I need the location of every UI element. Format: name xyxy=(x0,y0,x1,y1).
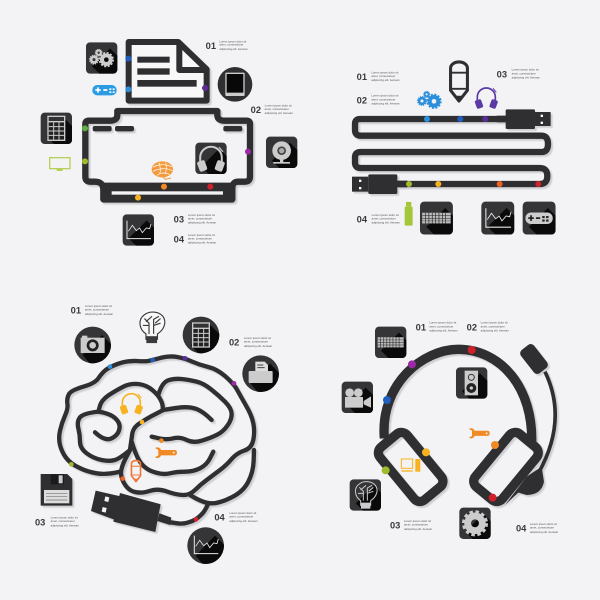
icon: blue gears xyxy=(418,91,441,108)
text: 02 xyxy=(467,321,509,332)
icon: green usb stick xyxy=(405,202,413,226)
text: 01: 01 xyxy=(416,322,426,332)
text: 03: 03 xyxy=(497,70,507,80)
text: 02: amet, consectetuer xyxy=(265,107,289,111)
text: 02: 02 xyxy=(229,338,239,348)
text: 02: adipiscing elit. Aenean xyxy=(371,101,400,105)
panel: USB cable infographic xyxy=(352,62,556,235)
icon: orange wrench xyxy=(469,428,490,438)
color dots xyxy=(82,56,251,201)
text: 02: adipiscing elit. Aenean xyxy=(481,328,509,332)
icon: printer xyxy=(242,355,281,394)
text: 04: adipiscing elit. Aenean xyxy=(188,241,217,245)
text: 03: 03 xyxy=(35,517,45,527)
icon: keyboard xyxy=(375,327,406,358)
color dots xyxy=(406,116,541,187)
text: 01: amet, consectetuer xyxy=(371,74,395,78)
text: 02: Lorem ipsum dolor sit xyxy=(265,103,292,107)
text: 02: amet, consectetuer xyxy=(371,97,395,101)
text: 04: Lorem ipsum dolor sit xyxy=(229,511,257,515)
text: 03: adipiscing elit. Aenean xyxy=(51,523,79,527)
icon: yellow computer xyxy=(401,459,420,472)
text: 01: adipiscing elit. Aenean xyxy=(85,312,114,316)
text: 02: 02 xyxy=(357,95,367,105)
text: 03: Lorem ipsum dolor sit xyxy=(51,515,78,519)
text: 04: amet, consectetuer xyxy=(188,237,212,241)
text: 04: adipiscing elit. Aenean xyxy=(229,519,258,523)
text: 04: 04 xyxy=(214,513,226,523)
text: 02: Lorem ipsum dolor sit xyxy=(371,94,399,98)
icon: brain bulb xyxy=(139,309,165,343)
text: 01: amet, consectetuer xyxy=(429,324,453,328)
text: 03: Lorem ipsum dolor sit xyxy=(404,519,431,523)
text: 02 xyxy=(229,336,273,348)
text: 01: 01 xyxy=(206,41,216,51)
text: 03 xyxy=(35,515,79,527)
icon: orange wrench xyxy=(155,447,177,458)
icon: gamepad xyxy=(523,202,556,235)
text: 03 xyxy=(174,213,217,225)
text: 02: 02 xyxy=(251,105,261,115)
icon: purple headphones xyxy=(474,88,498,109)
icon: gear xyxy=(459,508,491,539)
text: 01: Lorem ipsum dolor sit xyxy=(429,321,457,325)
icon: orange brain xyxy=(152,161,173,179)
text: 01: adipiscing elit. Aenean xyxy=(371,78,400,82)
text: 03: adipiscing elit. Aenean xyxy=(404,527,433,531)
text: 03 xyxy=(497,68,540,80)
icon: pencil xyxy=(451,62,467,101)
printer cable xyxy=(85,111,250,203)
text: 04: adipiscing elit. Aenean xyxy=(372,221,400,225)
text: 04: amet, consectetuer xyxy=(530,526,554,530)
text: 04 xyxy=(516,522,559,534)
text: 02 xyxy=(251,103,293,115)
text: 01: amet, consectetuer xyxy=(219,43,243,47)
icon: keyboard xyxy=(420,202,453,235)
icon: calculator xyxy=(41,113,72,144)
text: 01: 01 xyxy=(357,72,367,82)
icon: tablet xyxy=(218,67,252,102)
text: 01 xyxy=(71,304,114,316)
text: 04: Lorem ipsum dolor sit xyxy=(372,213,399,217)
text: 02 xyxy=(357,94,400,105)
text: 03: 03 xyxy=(390,521,400,531)
text: 04 xyxy=(174,233,217,245)
text: 04: amet, consectetuer xyxy=(372,217,396,221)
text: 01: adipiscing elit. Aenean xyxy=(219,47,248,51)
text: 03: adipiscing elit. Aenean xyxy=(188,221,217,225)
text: 04: Lorem ipsum dolor sit xyxy=(188,233,215,237)
text: 02: adipiscing elit. Aenean xyxy=(244,344,273,348)
text: 03: Lorem ipsum dolor sit xyxy=(512,68,539,72)
icon: speaker xyxy=(456,367,487,399)
text: 01: 01 xyxy=(71,306,81,316)
text: 01: Lorem ipsum dolor sit xyxy=(85,304,112,308)
icon: floppy disk xyxy=(41,474,72,506)
icon: gamepad xyxy=(92,85,117,95)
brain cable xyxy=(59,356,254,532)
text: 02: adipiscing elit. Aenean xyxy=(265,111,293,115)
text: 03: amet, consectetuer xyxy=(512,71,536,75)
text: 03: amet, consectetuer xyxy=(188,217,212,221)
icon: webcam xyxy=(266,137,297,168)
icon: video camera xyxy=(342,382,373,413)
text: 03: adipiscing elit. Aenean xyxy=(512,76,540,80)
text: 04: 04 xyxy=(357,215,368,225)
icon: chart xyxy=(187,527,226,566)
panel: printer infographic xyxy=(41,39,297,246)
icon: headset xyxy=(195,143,227,174)
text: 01: Lorem ipsum dolor sit xyxy=(371,70,399,74)
usb cable xyxy=(352,109,551,194)
panel: headset infographic xyxy=(342,321,559,539)
text: 04: 04 xyxy=(516,524,527,534)
text: 02: amet, consectetuer xyxy=(244,340,268,344)
text: 02: 02 xyxy=(467,322,477,332)
text: 01 xyxy=(357,70,400,82)
text: 02: Lorem ipsum dolor sit xyxy=(481,321,508,325)
text: 01: adipiscing elit. Aenean xyxy=(429,328,458,332)
text: 01 xyxy=(206,39,248,51)
color dots xyxy=(69,356,236,522)
icon: brain bulb xyxy=(350,479,381,511)
text: 02: amet, consectetuer xyxy=(481,324,505,328)
text: 04 xyxy=(214,511,258,523)
text: 04: amet, consectetuer xyxy=(229,515,253,519)
panel: brain infographic xyxy=(35,304,281,566)
usb plug xyxy=(91,491,171,532)
text: 02: Lorem ipsum dolor sit xyxy=(244,336,271,340)
text: 03: amet, consectetuer xyxy=(404,523,428,527)
icon: chart xyxy=(123,214,154,246)
text: 03: 03 xyxy=(174,215,184,225)
icon: chart xyxy=(481,202,514,235)
icon: calculator xyxy=(183,317,221,355)
text: 01 xyxy=(416,321,458,332)
icon: camera xyxy=(74,327,113,365)
text: 04: Lorem ipsum dolor sit xyxy=(530,522,557,526)
text: 04 xyxy=(357,213,400,225)
icon: monitor xyxy=(50,158,70,171)
icon: orange pencil xyxy=(131,460,141,482)
text: 04: adipiscing elit. Aenean xyxy=(530,530,559,534)
color dots xyxy=(382,346,499,502)
icon: gears xyxy=(86,42,117,74)
text: 04: 04 xyxy=(174,235,185,245)
text: 03: amet, consectetuer xyxy=(51,519,75,523)
document cable xyxy=(129,42,207,101)
text: 03: Lorem ipsum dolor sit xyxy=(188,213,215,217)
icon: yellow headphones xyxy=(119,394,143,415)
headset xyxy=(375,342,555,505)
text: 03 xyxy=(390,519,433,531)
text: 01: Lorem ipsum dolor sit xyxy=(219,39,247,43)
text: 01: amet, consectetuer xyxy=(85,308,109,312)
